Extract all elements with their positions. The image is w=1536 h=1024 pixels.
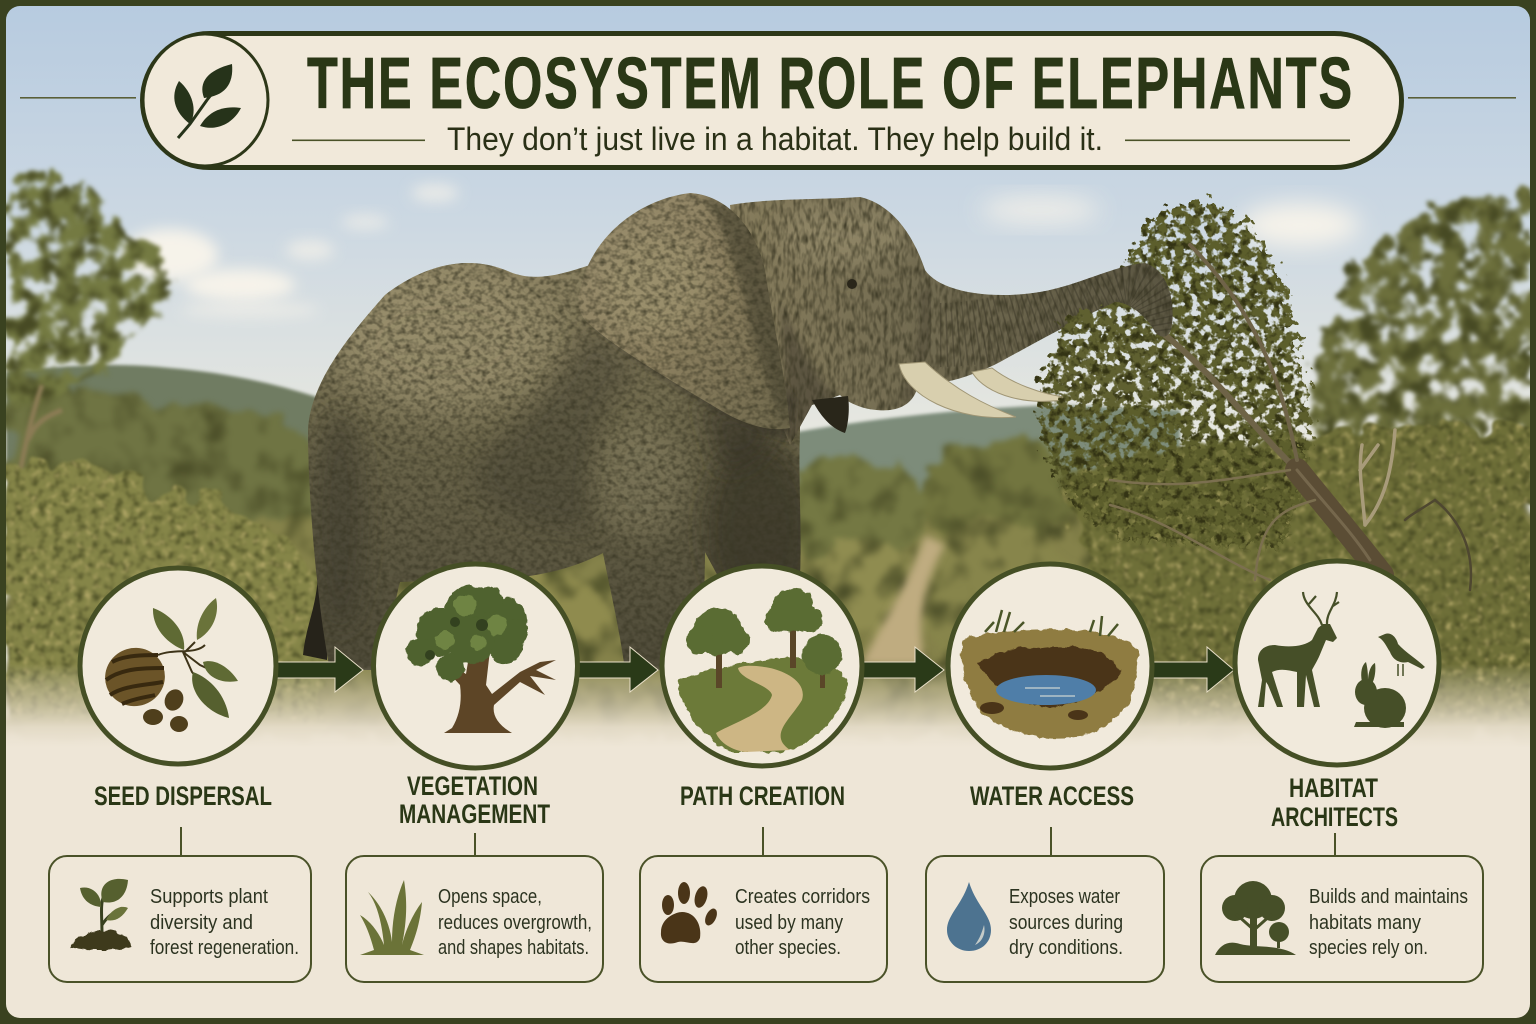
title heading: THE ECOSYSTEM ROLE OF ELEPHANTS: [307, 44, 1352, 124]
elephant tail: [303, 582, 328, 660]
path circle badge: [662, 566, 862, 766]
water description: dry conditions.: [1009, 937, 1123, 959]
vegetation heading: [399, 771, 550, 829]
leaning tree trunk and branches: [1110, 245, 1471, 590]
left front shrubs: [6, 460, 330, 720]
vegetation connector: [474, 833, 476, 857]
lower cream panel: [6, 747, 1530, 1018]
dirt trail: [860, 535, 945, 665]
elephant ear shadow: [602, 335, 795, 440]
icon: waterhole: [961, 610, 1138, 738]
icon: nut and leaves: [97, 598, 238, 732]
path card: [640, 856, 887, 982]
habitat heading: HABITAT: [1289, 773, 1378, 803]
water description: sources during: [1009, 912, 1123, 934]
water circle badge: [948, 564, 1152, 768]
vegetation description: reduces overgrowth,: [438, 912, 592, 934]
seed description: diversity and: [150, 912, 253, 934]
leaf badge: [143, 34, 268, 166]
elephant tusks: [899, 362, 1072, 418]
subtitle rule right: [1125, 140, 1350, 141]
elephant body: [308, 263, 815, 670]
habitat connector: [1334, 833, 1336, 857]
mid-ground trees: [6, 374, 312, 526]
left tree: [6, 175, 175, 505]
elephant head and trunk: [730, 197, 1173, 450]
path description: other species.: [735, 937, 841, 959]
water heading: WATER ACCESS: [970, 781, 1134, 811]
habitat description: Builds and maintains: [1309, 886, 1468, 908]
elephant: [303, 193, 1173, 670]
step 5: habitat architects: [1201, 561, 1483, 982]
title banner: [20, 34, 1516, 168]
icon: sprout: [70, 879, 131, 950]
clouds: [122, 184, 1360, 318]
elephant ear: [578, 193, 800, 430]
elephant jaw shadow: [812, 396, 849, 433]
icon: grass: [360, 880, 424, 955]
habitat description: [1309, 886, 1468, 959]
icon: tree silhouette: [1215, 881, 1296, 955]
habitat description: habitats many: [1309, 912, 1421, 934]
icon: water drop: [947, 882, 991, 951]
seed card: [49, 856, 311, 982]
seed connector: [180, 827, 182, 857]
leaning tree crown: [1040, 203, 1310, 550]
step 2: vegetation management: [346, 564, 603, 982]
sky: [6, 6, 1530, 766]
banner pill: [142, 34, 1402, 168]
water description: Exposes water: [1009, 886, 1120, 908]
habitat card: [1201, 856, 1483, 982]
right far tree: [1307, 192, 1536, 480]
vegetation card: [346, 856, 603, 982]
path heading: PATH CREATION: [680, 781, 845, 811]
habitat description: species rely on.: [1309, 937, 1428, 959]
step 4: water access: [926, 564, 1164, 982]
seed description: forest regeneration.: [150, 937, 299, 959]
vegetation heading: VEGETATION: [407, 771, 538, 801]
fade to cream: [6, 664, 1530, 748]
seed description: [150, 886, 299, 959]
left rule: [20, 97, 136, 99]
seed circle badge: [80, 568, 276, 764]
icon: tree with broken branch: [406, 586, 556, 733]
vegetation circle badge: [374, 564, 578, 768]
habitat heading: ARCHITECTS: [1271, 802, 1398, 832]
seed heading: SEED DISPERSAL: [94, 781, 272, 811]
path description: Creates corridors: [735, 886, 870, 908]
vegetation description: [438, 886, 592, 959]
water connector: [1050, 827, 1052, 857]
right rule: [1408, 97, 1516, 99]
water card: [926, 856, 1164, 982]
path connector: [762, 827, 764, 857]
subtitle rule left: [292, 140, 425, 141]
mid-ground shrubland: [6, 501, 1530, 729]
path description: used by many: [735, 912, 843, 934]
icon: winding path scene: [678, 588, 848, 752]
icon: deer, bird and rabbit: [1258, 592, 1425, 728]
blurred bushes centre: [530, 432, 1078, 640]
elephant eye: [847, 279, 857, 289]
background landscape: [6, 6, 1536, 766]
subtitle: They don’t just live in a habitat. They help build it.: [447, 121, 1103, 157]
distant hills: [6, 365, 1180, 500]
path description: [735, 886, 870, 959]
vegetation description: Opens space,: [438, 886, 542, 908]
vegetation description: and shapes habitats.: [438, 937, 589, 959]
habitat circle badge: [1235, 561, 1439, 765]
foliage over trunk: [1060, 312, 1160, 420]
step 3: path creation: [640, 566, 887, 982]
icon: paw print: [661, 882, 719, 944]
water description: [1009, 886, 1123, 959]
step 1: seed dispersal: [49, 568, 311, 982]
right dark understory: [1060, 424, 1536, 720]
vegetation heading: MANAGEMENT: [399, 799, 550, 829]
seed description: Supports plant: [150, 886, 268, 908]
flow arrows: [276, 647, 1234, 692]
habitat heading: [1271, 773, 1398, 832]
